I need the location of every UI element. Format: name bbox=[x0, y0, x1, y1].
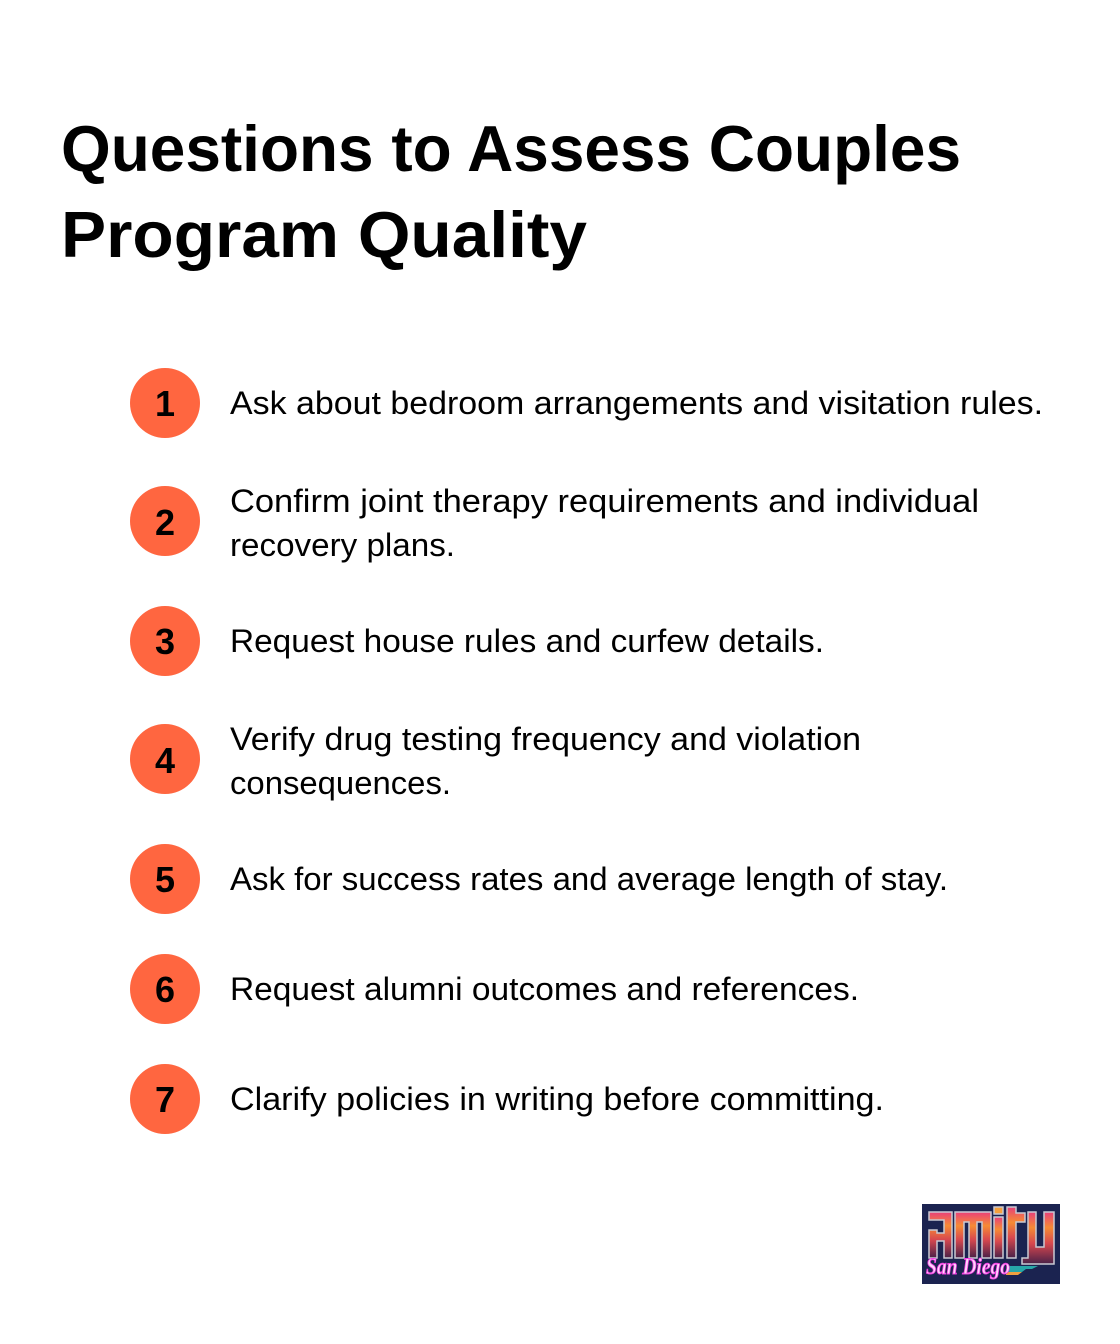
list item 1 bbox=[130, 368, 1043, 438]
list item 4 bbox=[130, 721, 861, 801]
list item 5 bbox=[130, 844, 948, 914]
list item 2: recovery plans. bbox=[230, 527, 455, 563]
logo: Amity San Diego: San Diego bbox=[926, 1254, 1010, 1279]
list item 3: Request house rules and curfew details. bbox=[230, 623, 824, 659]
list item 2: 2 bbox=[155, 502, 175, 543]
list item 3 bbox=[130, 606, 824, 676]
list item 5: 5 bbox=[155, 859, 175, 900]
list item 1: Ask about bedroom arrangements and visitation rules. bbox=[230, 385, 1043, 421]
list item 6: 6 bbox=[155, 969, 175, 1010]
list item 4: consequences. bbox=[230, 765, 451, 801]
list item 2 bbox=[130, 483, 979, 563]
list item 3: 3 bbox=[155, 621, 175, 662]
list item 6 bbox=[130, 954, 859, 1024]
list item 2: Confirm joint therapy requirements and individual bbox=[230, 483, 979, 519]
list item 7 bbox=[130, 1064, 884, 1134]
logo: Amity San Diego bbox=[922, 1204, 1060, 1284]
title bbox=[61, 112, 961, 271]
title: Questions to Assess Couples bbox=[61, 112, 961, 185]
list item 1: 1 bbox=[155, 383, 175, 424]
list item 5: Ask for success rates and average length of stay. bbox=[230, 861, 948, 897]
list item 6: Request alumni outcomes and references. bbox=[230, 971, 859, 1007]
list item 7: 7 bbox=[155, 1079, 175, 1120]
list item 7: Clarify policies in writing before committing. bbox=[230, 1081, 884, 1117]
title: Program Quality bbox=[61, 198, 587, 271]
list item 4: Verify drug testing frequency and violation bbox=[230, 721, 861, 757]
list item 4: 4 bbox=[155, 740, 175, 781]
